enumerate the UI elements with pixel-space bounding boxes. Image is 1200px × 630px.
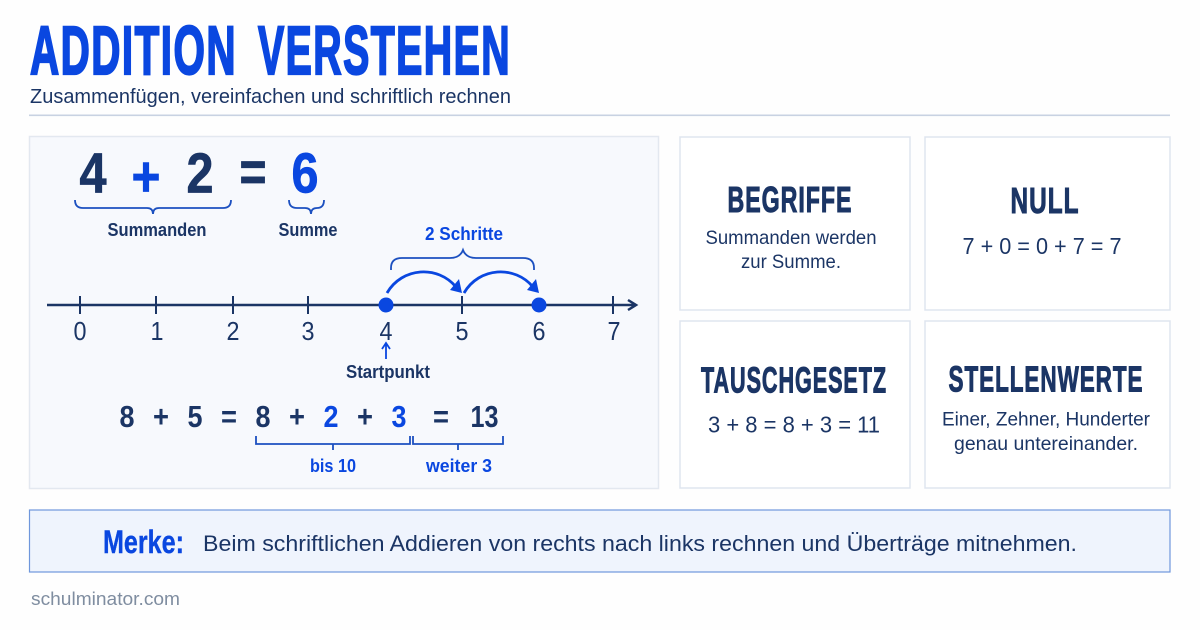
- number line: 6: [532, 316, 546, 346]
- card: Begriffe: zur Summe.: [741, 251, 841, 273]
- label: Startpunkt: Startpunkt: [346, 362, 430, 382]
- equation: 4 + 2 = 6: 4: [80, 142, 107, 206]
- equation: 8 + 5: +: [289, 399, 305, 434]
- card: Tauschgesetz: TAUSCHGESETZ: [701, 360, 887, 400]
- bracket: bis 10: [256, 436, 410, 450]
- card: Stellenwerte: [925, 321, 1170, 488]
- card: Null: NULL: [1010, 180, 1080, 221]
- subtitle: Zusammenfügen, vereinfachen und schriftlich rechnen: [30, 85, 511, 108]
- label: Summe: Summe: [278, 219, 338, 240]
- bracket: weiter 3: [413, 436, 503, 450]
- callout: Merke: [30, 510, 1170, 572]
- equation: 4 + 2 = 6: 6: [292, 142, 318, 206]
- number line: 4: [380, 316, 392, 346]
- equation: 8 + 5: 5: [188, 399, 202, 434]
- card: Tauschgesetz: [680, 321, 910, 488]
- number line: 3: [302, 316, 314, 346]
- equation: 8 + 5: 8: [256, 399, 270, 434]
- label: bis 10: bis 10: [310, 456, 356, 476]
- card: Tauschgesetz: 3 + 8 = 8 + 3 = 11: [708, 412, 880, 438]
- equation: 8 + 5: +: [357, 399, 373, 434]
- card: Begriffe: [680, 137, 910, 310]
- equation: 8 + 5: [120, 399, 498, 434]
- equation: 8 + 5: =: [221, 399, 237, 434]
- title: VERSTEHEN: [258, 12, 511, 89]
- arrow: Startpunkt: [382, 343, 390, 359]
- callout: Merke: Beim schriftlichen Addieren von rechts nach links rechnen und Überträge mitnehmen.: [203, 531, 1077, 556]
- panel: addition examples: [30, 136, 658, 488]
- card: Null: 7 + 0 = 0 + 7 = 7: [962, 233, 1122, 259]
- card: Begriffe: Summanden werden: [706, 227, 876, 249]
- card: Begriffe: BEGRIFFE: [728, 179, 852, 220]
- number line: 7: [608, 316, 620, 346]
- card: Stellenwerte: Einer, Zehner, Hunderter: [942, 408, 1150, 430]
- card: Null: [925, 137, 1170, 310]
- equation: 8 + 5: 8: [120, 399, 134, 434]
- number line: 2: [226, 316, 240, 346]
- equation: 4 + 2 = 6: =: [240, 140, 266, 204]
- number line: 5: [456, 316, 468, 346]
- title: ADDITION: [30, 12, 237, 89]
- label: weiter 3: weiter 3: [425, 456, 492, 476]
- label: Summanden: Summanden: [108, 219, 206, 240]
- brace: Summe: [289, 200, 324, 214]
- callout: Merke: Merke:: [103, 524, 184, 560]
- footer: schulminator.com: [31, 588, 180, 609]
- equation: 8 + 5: +: [153, 399, 169, 434]
- equation: 4 + 2 = 6: +: [132, 145, 160, 209]
- equation: 8 + 5: 3: [392, 399, 406, 434]
- card: Stellenwerte: genau untereinander.: [954, 433, 1138, 455]
- equation: 4 + 2 = 6: 2: [186, 142, 214, 206]
- equation: 8 + 5: =: [433, 399, 449, 434]
- number line: [47, 296, 636, 346]
- brace: Summanden: [75, 200, 231, 214]
- brace: 2 Schritte: [391, 250, 534, 270]
- number line: 1: [150, 316, 164, 346]
- equation: 4 + 2 = 6: [80, 140, 318, 209]
- jump arrows: [387, 272, 539, 293]
- equation: 8 + 5: 13: [470, 399, 498, 434]
- equation: 8 + 5: 2: [324, 399, 338, 434]
- number line: 0: [74, 316, 86, 346]
- label: 2 Schritte: 2 Schritte: [425, 223, 503, 244]
